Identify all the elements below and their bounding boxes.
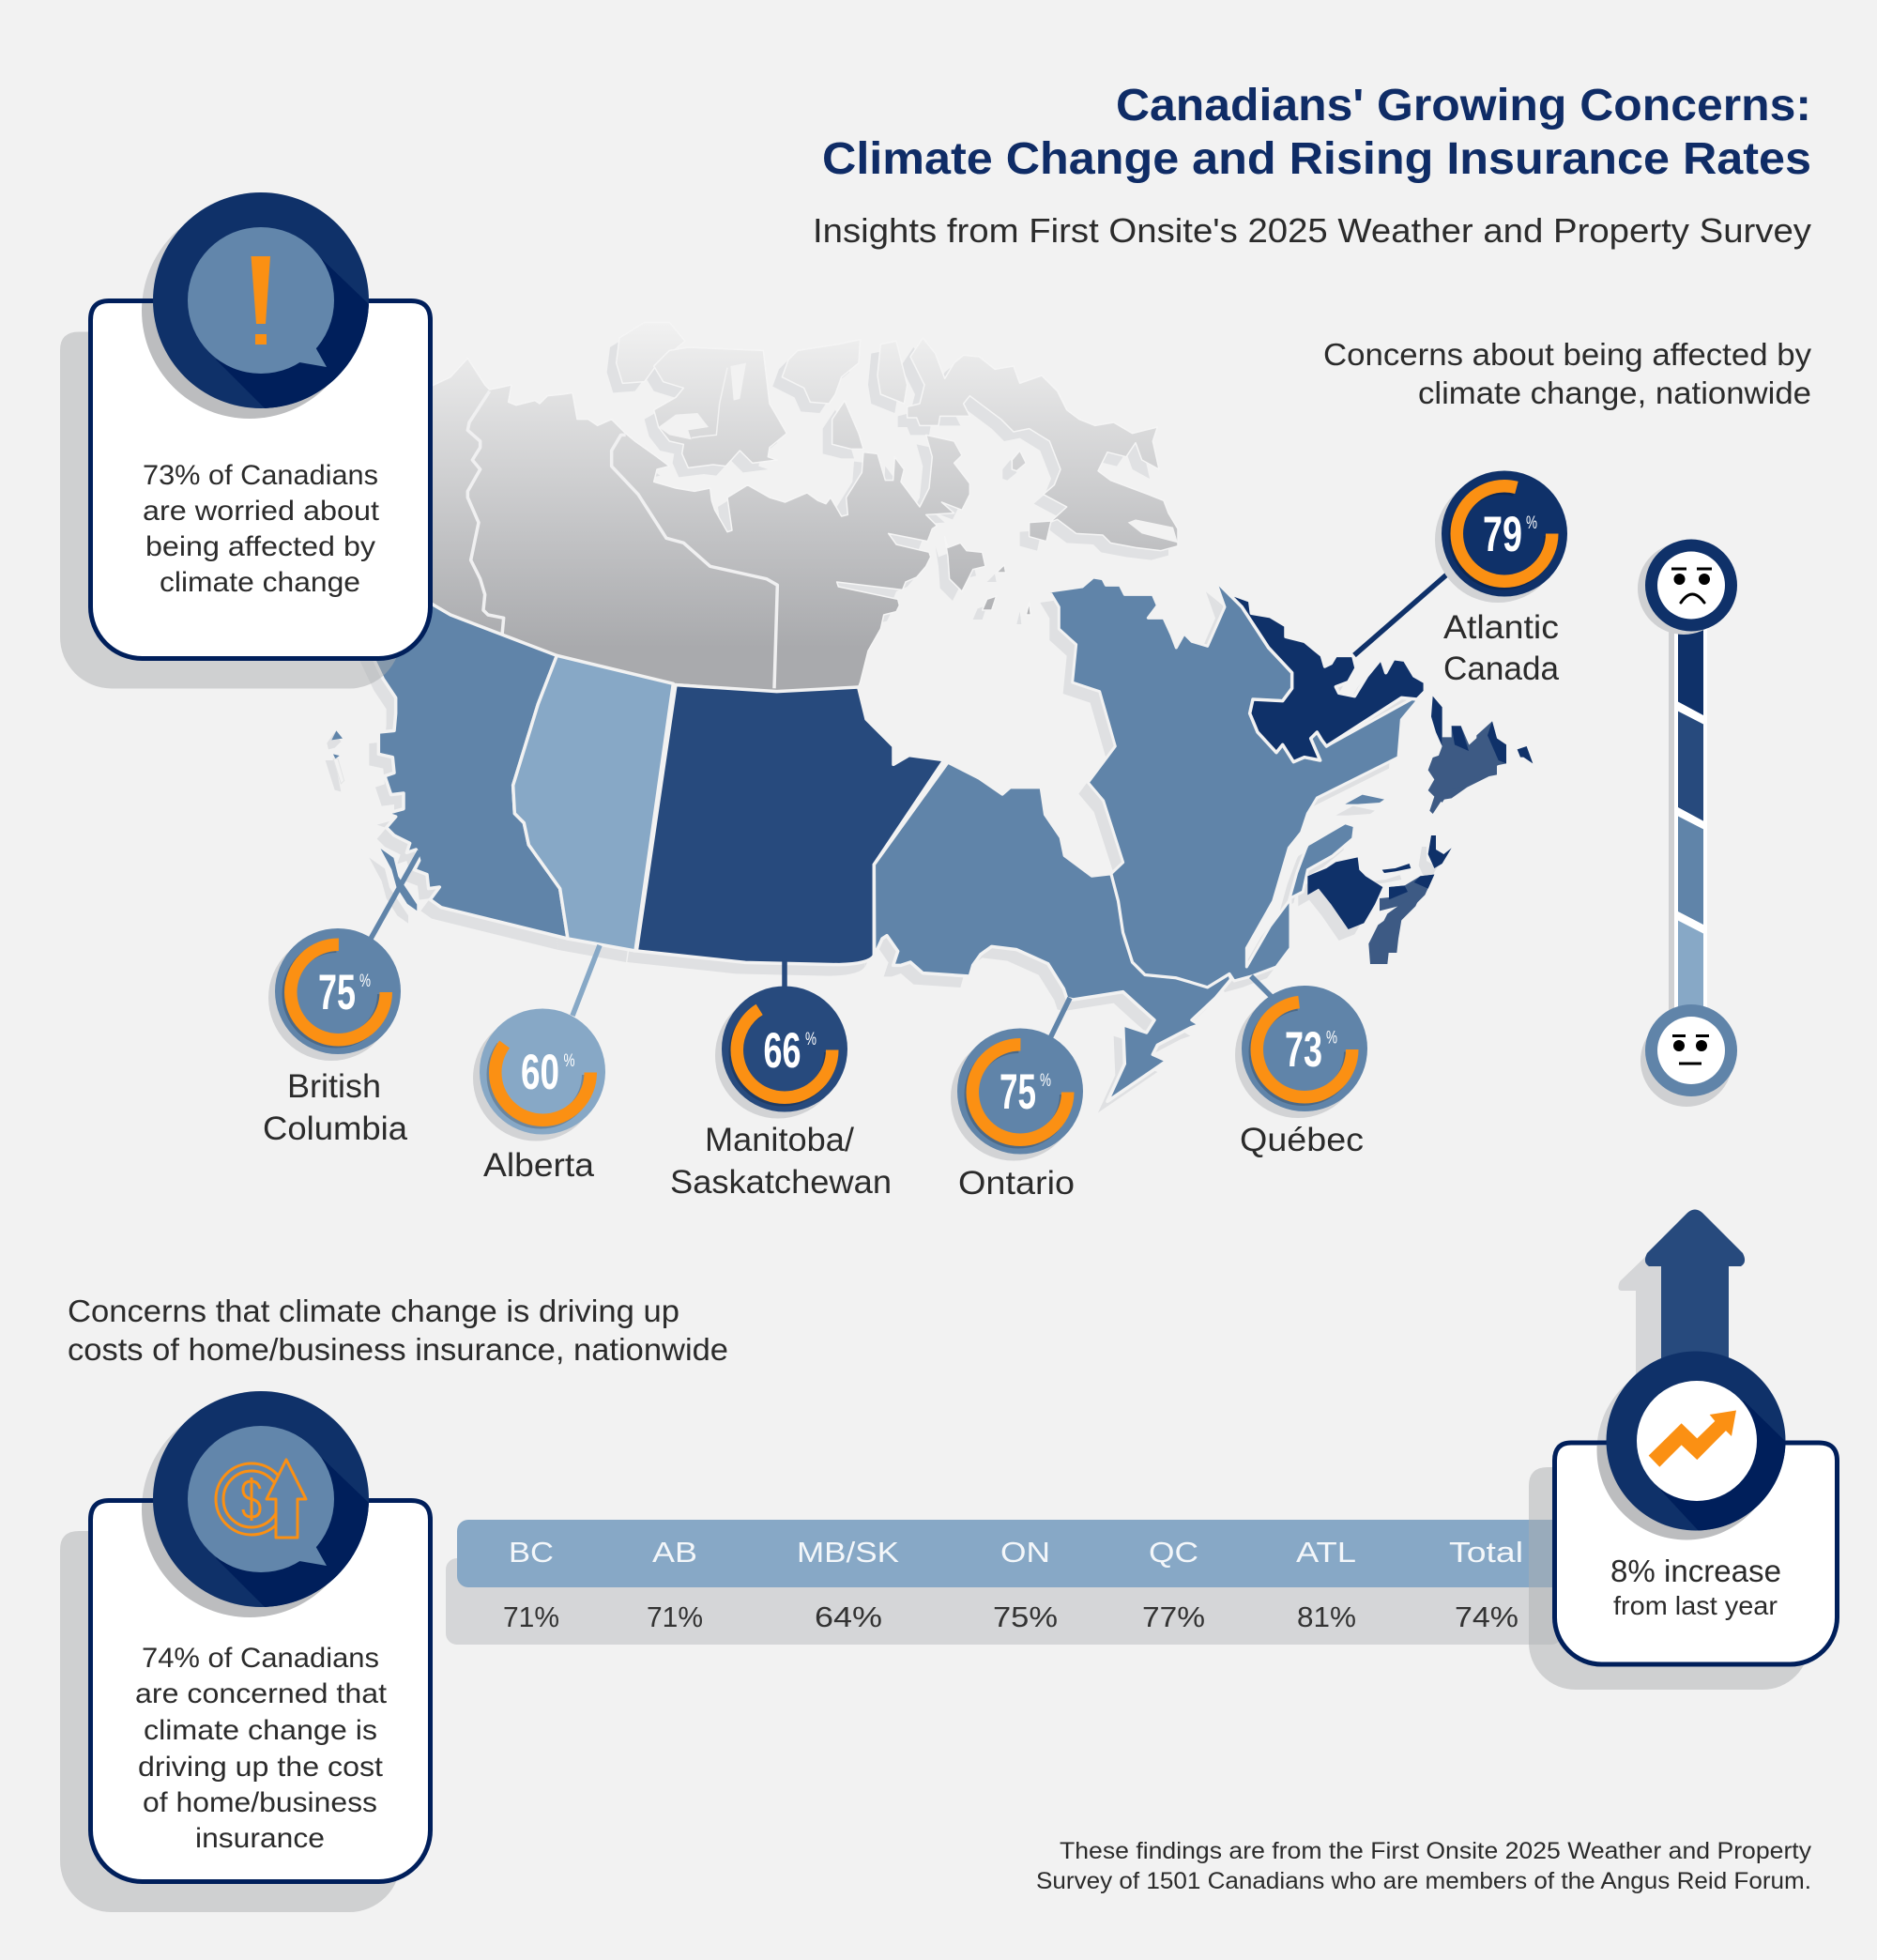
badge: Alberta 60% (473, 945, 605, 1141)
card text: insurance (195, 1823, 325, 1854)
label: Atlantic Canada (1443, 609, 1560, 687)
badge: Manitoba/Saskatchewan 66% (715, 959, 847, 1119)
title: Climate Change and Rising Insurance Rates (822, 134, 1811, 184)
province: Quebec (1049, 577, 1417, 988)
province: Prince Edward Island (1345, 795, 1384, 804)
badge: Manitoba/Saskatchewan 66%: % (805, 1030, 816, 1049)
card text: are worried about (143, 496, 380, 527)
table header labels: ATL (1296, 1536, 1356, 1569)
badge: Atlantic Canada 79%: 79 (1483, 507, 1522, 562)
card shadow (1529, 1467, 1809, 1690)
badge: Quebec 73%: % (1326, 1029, 1337, 1048)
card box (1554, 1443, 1838, 1664)
card text (143, 460, 380, 598)
province: Manitoba and Saskatchewan (636, 685, 944, 965)
label: British Columbia (263, 1068, 408, 1147)
card text: being affected by (145, 531, 375, 562)
table header labels: QC (1149, 1536, 1198, 1569)
table header labels: MB/SK (797, 1536, 899, 1569)
table values: 64% (815, 1600, 882, 1633)
table values: 71% (503, 1600, 559, 1633)
table values: 71% (647, 1600, 703, 1633)
table header labels: AB (652, 1536, 697, 1569)
scale casing (1669, 601, 1674, 1023)
label: Quebec: Québec (1240, 1122, 1364, 1158)
heading: insurance concern (68, 1294, 728, 1367)
icon: exclamation speech bubble (153, 192, 369, 418)
arrow: upward increase (1645, 1209, 1745, 1408)
card: 8% increase (1529, 1352, 1838, 1690)
arrow shadow (1618, 1233, 1719, 1408)
heading: nationwide climate concern: Concerns about being affected by (1323, 337, 1812, 372)
badge: Alberta 60%: 60 (521, 1045, 559, 1100)
Haida Gwaii islands (326, 730, 344, 791)
card text: climate change is (144, 1715, 377, 1746)
province: Alberta (513, 655, 673, 951)
label: Manitoba/Saskatchewan: Saskatchewan (670, 1164, 892, 1201)
face: neutral (1640, 1004, 1737, 1107)
badge: Ontario 75% (951, 998, 1083, 1160)
label: Manitoba/Saskatchewan (670, 1122, 892, 1201)
heading: insurance concern: costs of home/business insurance, nationwide (68, 1332, 728, 1367)
province: British Columbia (357, 582, 568, 939)
Cape Breton (1428, 835, 1452, 868)
icon shadow inside card (142, 303, 328, 419)
label: Ontario: Ontario (958, 1165, 1075, 1202)
map of Canada (326, 322, 1533, 1112)
province: Newfoundland (1431, 697, 1533, 803)
label: Alberta: Alberta (483, 1147, 595, 1184)
badge: Ontario 75%: % (1040, 1071, 1051, 1091)
label: Atlantic Canada: Atlantic (1443, 609, 1559, 646)
card: concerned about insurance costs (60, 1391, 431, 1912)
scale segments (1678, 601, 1703, 715)
card text: 73% of Canadians (143, 460, 378, 491)
table values: 77% (1142, 1600, 1205, 1633)
badge: Alberta 60%: % (563, 1051, 575, 1071)
map: northern territories and arctic islands (394, 322, 1178, 692)
province: Nova Scotia (1378, 875, 1434, 953)
face: concerned (1638, 539, 1737, 635)
badge: Atlantic Canada 79% (1354, 471, 1567, 655)
card text: are concerned that (135, 1678, 388, 1709)
card shadow (60, 332, 401, 689)
badge: Quebec 73%: 73 (1285, 1022, 1322, 1078)
table header row (457, 1520, 1574, 1587)
card shadow (60, 1531, 401, 1912)
icon: rising cost speech bubble (153, 1391, 369, 1616)
province: Ontario (874, 762, 1231, 1101)
heading: nationwide climate concern: climate change, nationwide (1418, 375, 1811, 410)
province: Labrador (1215, 580, 1425, 762)
label: British Columbia: Columbia (263, 1110, 408, 1147)
card text (1610, 1554, 1781, 1620)
card: worried about climate change (60, 192, 431, 689)
table values: 75% (993, 1600, 1058, 1633)
badge: British Columbia 75%: % (359, 972, 371, 991)
table header labels: Total (1449, 1536, 1523, 1569)
card text: driving up the cost (138, 1752, 384, 1783)
card text (135, 1643, 388, 1854)
badge: Ontario 75%: 75 (1000, 1064, 1036, 1120)
icon shadow outside card (1597, 1361, 1776, 1539)
card text: from last year (1613, 1591, 1778, 1620)
table values row (446, 1558, 1563, 1645)
icon shadow outside card (142, 203, 358, 419)
label: British Columbia: British (287, 1068, 381, 1105)
province: New Brunswick (1307, 857, 1411, 929)
subtitle: Insights from First Onsite's 2025 Weather and Property Survey (813, 211, 1811, 250)
card box (90, 300, 431, 659)
card box (90, 1500, 431, 1881)
badge: Atlantic Canada 79%: % (1526, 513, 1537, 533)
card text: 74% of Canadians (142, 1643, 379, 1674)
badge: Manitoba/Saskatchewan 66%: 66 (764, 1023, 801, 1079)
table values: 81% (1297, 1600, 1356, 1633)
title: Canadians' Growing Concerns: (1116, 81, 1811, 130)
footnote (1036, 1838, 1812, 1894)
card text: climate change (160, 567, 360, 598)
table header labels: ON (1000, 1536, 1050, 1569)
icon shadow outside card (142, 1401, 358, 1617)
table: insurance concern by region (446, 1520, 1574, 1645)
label: Atlantic Canada: Canada (1443, 651, 1560, 687)
footnote: Survey of 1501 Canadians who are members of the Angus Reid Forum. (1036, 1868, 1811, 1894)
title (822, 81, 1811, 184)
heading: insurance concern: Concerns that climate change is driving up (68, 1294, 679, 1328)
icon shadow inside card (1597, 1446, 1754, 1539)
label: Manitoba/Saskatchewan: Manitoba/ (705, 1122, 854, 1158)
map: northern land shadow (385, 331, 1168, 701)
footnote: These findings are from the First Onsite 2025 Weather and Property (1060, 1838, 1812, 1864)
table header labels (509, 1536, 1523, 1569)
Vancouver Island (378, 847, 418, 912)
map: province shadows (347, 589, 1497, 1112)
table values (503, 1600, 1518, 1633)
scale: concern thermometer (1638, 539, 1737, 1107)
card text: 8% increase (1610, 1554, 1781, 1588)
icon: trend arrow (1607, 1352, 1787, 1539)
badge: British Columbia 75%: 75 (318, 965, 356, 1020)
icon shadow inside card (142, 1503, 328, 1617)
badge: British Columbia 75% (268, 851, 420, 1061)
table header labels: BC (509, 1536, 554, 1569)
badge: Quebec 73% (1235, 976, 1367, 1118)
table values: 74% (1455, 1600, 1518, 1633)
heading: nationwide climate concern (1323, 337, 1812, 410)
card text: of home/business (143, 1787, 377, 1818)
